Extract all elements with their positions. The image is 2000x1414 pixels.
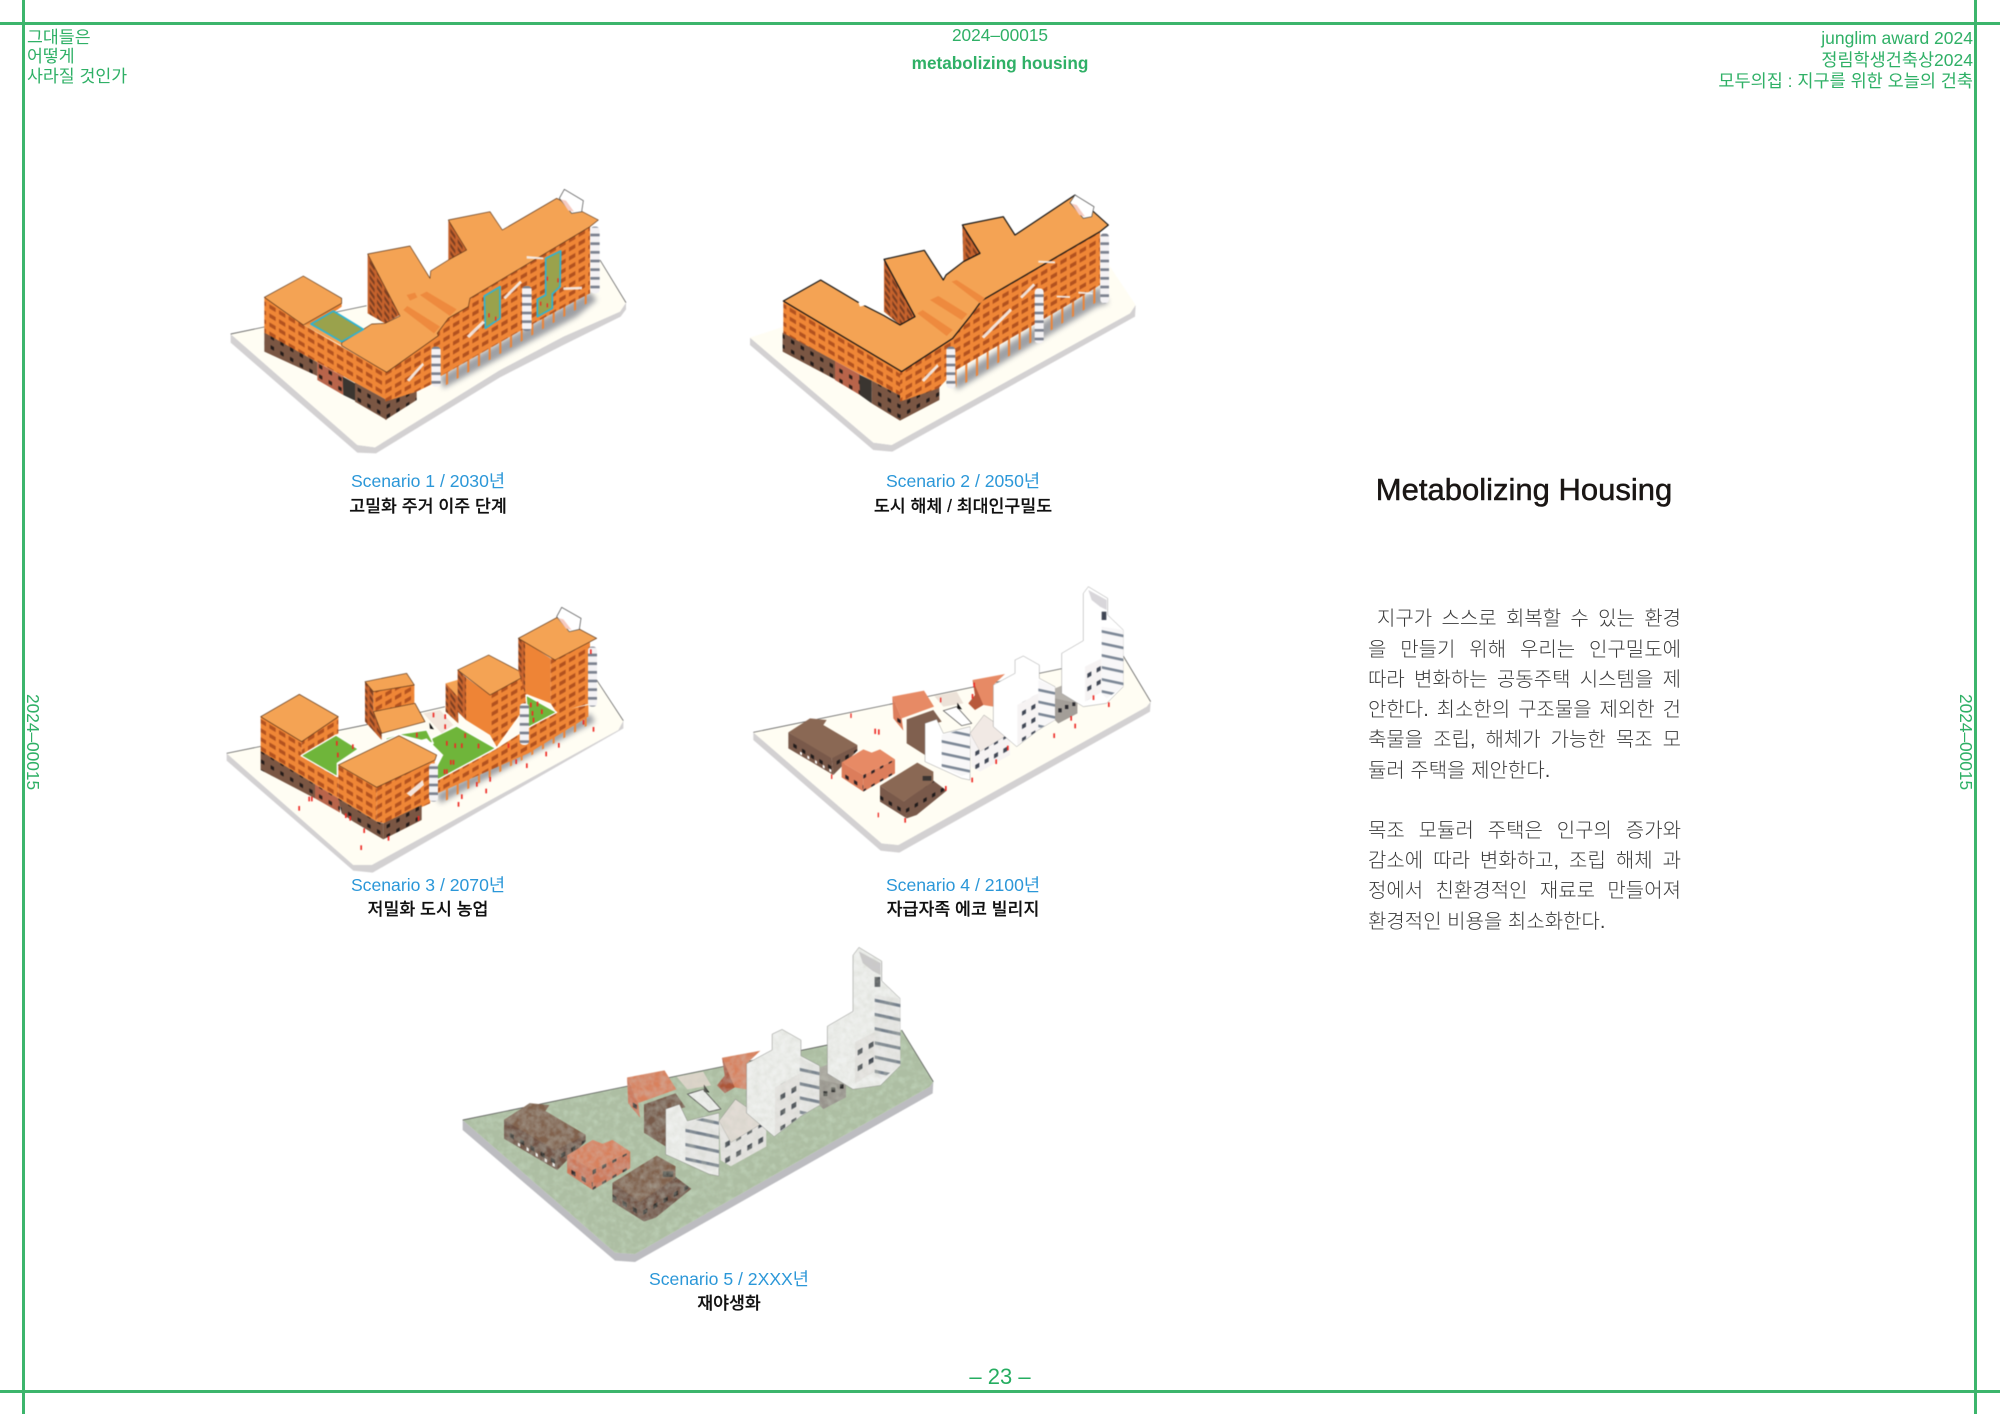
text: 감소에 따라 변화하고, 조립 해체 과: [1368, 850, 1681, 872]
site plinth: [227, 680, 623, 873]
text block: paragraph 2: [1368, 820, 1681, 933]
site plinth: [231, 260, 626, 453]
caption: scenario 1 title: 고밀화 주거 이주 단계: [349, 496, 507, 516]
caption: scenario 4 year: Scenario 4 / 2100년: [886, 875, 1040, 895]
side label: left entry number: 2024–00015: [23, 694, 43, 790]
text: 듈러 주택을 제안한다.: [1368, 760, 1550, 782]
panel: scenario 1: [230, 188, 627, 516]
text: 안한다. 최소한의 구조물을 제외한 건: [1368, 699, 1681, 721]
people: [831, 683, 1110, 823]
buildings: rear blocks and towers: [365, 617, 597, 803]
header: project title left: 그대들은: [27, 26, 91, 46]
text block: paragraph 1: [1368, 608, 1681, 782]
heading: metabolizing housing: Metabolizing Housing: [1376, 472, 1672, 507]
header: award information: 정림학생건축상2024: [1821, 50, 1973, 70]
text: 따라 변화하는 공동주택 시스템을 제: [1368, 669, 1681, 691]
header: award information: junglim award 2024: [1821, 28, 1973, 48]
rooftop pavilion: [557, 607, 581, 632]
caption: scenario 4 title: 자급자족 에코 빌리지: [887, 899, 1039, 919]
people: [298, 649, 594, 850]
rooftop pavilion: [1070, 195, 1094, 218]
text: 축물을 조립, 해체가 가능한 목조 모: [1368, 729, 1681, 751]
panel: scenario 4: [752, 586, 1152, 919]
caption: scenario 2 year: Scenario 2 / 2050년: [886, 471, 1040, 491]
panel: scenario 2: [750, 194, 1136, 516]
header: award information: [1718, 28, 1973, 91]
inserted modules: courtyard and green panels: [311, 251, 561, 342]
header: project title left: 어떻게: [27, 46, 75, 66]
page number: – 23 –: [969, 1364, 1031, 1389]
rooftop pavilion: [559, 189, 583, 213]
building: facades, pilotis and base: [783, 225, 1108, 421]
header: entry number and project name: [912, 25, 1088, 73]
text: 을 만들기 위해 우리는 인구밀도에: [1368, 639, 1681, 661]
caption: scenario 2 title: 도시 해체 / 최대인구밀도: [874, 496, 1052, 516]
frame: left rule: [22, 0, 25, 1414]
connecting bridges: [922, 261, 1093, 382]
farm lawns: [385, 695, 557, 780]
axonometric: scenario 1 high-density housing: [230, 188, 627, 454]
stair towers: [431, 227, 600, 387]
buildings: weathered village: [504, 947, 900, 1221]
caption: scenario 1 year: Scenario 1 / 2030년: [351, 471, 505, 491]
axonometric: scenario 5 rewilding: [462, 946, 934, 1262]
caption: scenario 3 title: 저밀화 도시 농업: [368, 899, 488, 919]
connecting bridges: [407, 256, 582, 382]
header: project title left: 사라질 것인가: [27, 66, 127, 86]
stair towers: [946, 233, 1109, 388]
axonometric: scenario 4 eco village: [752, 586, 1152, 853]
header: entry number and project name: 2024–00015: [952, 25, 1048, 45]
frame: right rule: [1974, 0, 1977, 1414]
side label: right entry number: 2024–00015: [1956, 694, 1976, 790]
roof: [264, 198, 598, 372]
header: project title left: [27, 26, 127, 86]
header: award information: 모두의집 : 지구를 위한 오늘의 건축: [1718, 71, 1973, 91]
roof: [783, 195, 1108, 372]
panel: scenario 3: [226, 606, 624, 919]
axonometric: scenario 3 low-density urban farming: [226, 606, 624, 873]
site plinth: [750, 267, 1136, 452]
buildings: front blocks: [261, 694, 437, 839]
site plinth: [753, 653, 1151, 853]
panel: scenario 5: [462, 946, 934, 1313]
stair towers: [429, 647, 597, 802]
caption: scenario 3 year: Scenario 3 / 2070년: [351, 875, 505, 895]
text: 환경적인 비용을 최소화한다.: [1368, 911, 1605, 933]
building: facades, pilotis and base: [264, 220, 597, 420]
text: 목조 모듈러 주택은 인구의 증가와: [1368, 820, 1681, 842]
frame: bottom rule: [0, 1390, 2000, 1393]
caption: scenario 5 year: Scenario 5 / 2XXX년: [649, 1269, 809, 1289]
buildings: remaining village: [788, 587, 1123, 818]
caption: scenario 5 title: 재야생화: [697, 1293, 761, 1313]
header: entry number and project name: metabolizing housing: [912, 53, 1088, 73]
text: 지구가 스스로 회복할 수 있는 환경: [1377, 608, 1681, 630]
text: 정에서 친환경적인 재료로 만들어져: [1368, 880, 1681, 902]
overgrown site plinth: [463, 1030, 933, 1262]
axonometric: scenario 2 maximum density: [750, 194, 1136, 452]
frame: top rule: [0, 22, 2000, 25]
